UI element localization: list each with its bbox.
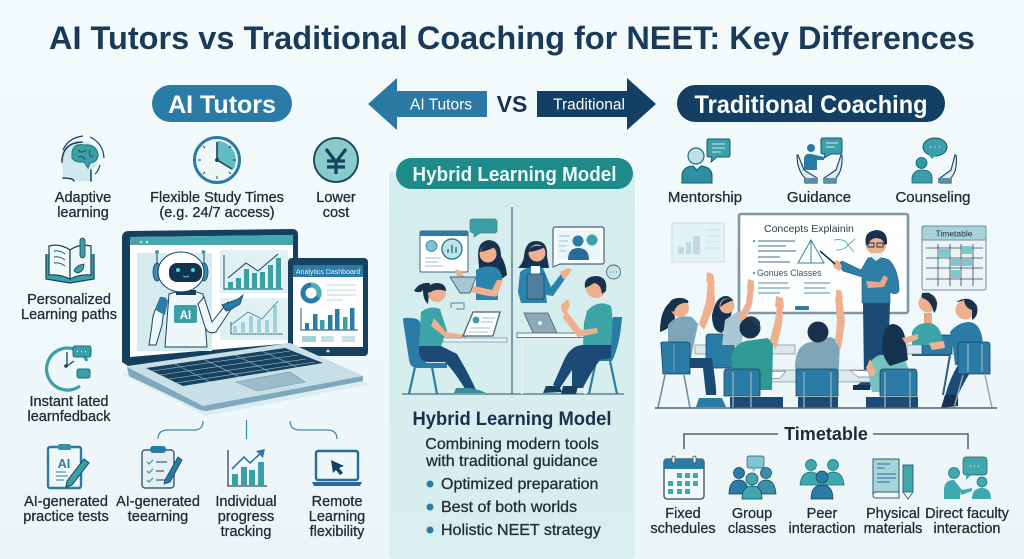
- icon: checklist clipboard: [142, 446, 182, 488]
- standing woman presenter: [518, 241, 572, 303]
- icon: group classes: [729, 456, 776, 499]
- label: group classes: Group: [732, 506, 772, 522]
- laptop base: [127, 343, 363, 411]
- hybrid heading text: Hybrid Learning Model: [412, 408, 612, 430]
- label: adaptive learning: Adaptive: [55, 190, 111, 206]
- label: physical materials: materials: [864, 521, 922, 537]
- heading: timetable with bracket: Timetable: [784, 424, 868, 444]
- heading: AI Tutors: AI Tutors: [168, 91, 276, 119]
- student: long hair front right: [866, 324, 918, 408]
- label: direct faculty interaction: Direct faculty: [925, 506, 1010, 522]
- icon: instant feedback clock: [47, 346, 91, 390]
- whiteboard: Concepts Explainin: [764, 223, 854, 235]
- vs label: VS: [497, 91, 527, 117]
- student: grey-blue shirt raising hand: [795, 290, 845, 408]
- label: personalized learning paths: Personalized: [27, 292, 111, 308]
- classroom floor: [655, 407, 997, 409]
- label: instant feedback: Instant lated: [30, 394, 108, 410]
- student: ponytail raising hand: [658, 272, 734, 408]
- icon: open book with pen: [46, 238, 94, 283]
- students' back desks: [695, 345, 957, 382]
- arrow: Traditional: Traditional: [553, 96, 625, 114]
- pill: hybrid heading: Hybrid Learning Model: [412, 163, 616, 186]
- label: fixed schedules: Fixed: [665, 506, 701, 522]
- panel: hybrid learning model: [389, 158, 635, 559]
- label: peer interaction: interaction: [789, 521, 855, 537]
- label: guidance: Guidance: [787, 189, 851, 206]
- icon: physical materials: [873, 459, 913, 499]
- label: AI-generated learning: teearning: [128, 509, 188, 525]
- label: remote learning flexibility: Remote: [312, 494, 362, 510]
- icon: remote laptop: [312, 451, 362, 486]
- icon: peer interaction: [800, 460, 844, 499]
- seated man at table: [543, 276, 622, 394]
- arrow: AI Tutors: AI Tutors: [410, 96, 472, 114]
- icon: adaptive learning: [61, 136, 104, 181]
- tablet: Analytics Dashboard: [296, 269, 360, 276]
- icon: fixed schedules calendar: [664, 456, 704, 499]
- label: remote learning flexibility: Learning: [309, 509, 365, 525]
- standing woman with tablet: [450, 240, 507, 300]
- icon: clock: [194, 138, 240, 182]
- label: instant feedback: learnfedback: [27, 409, 111, 425]
- timetable poster: Timetable: [935, 228, 973, 238]
- seated woman at laptop: [403, 283, 507, 394]
- icon: guidance: [797, 138, 842, 183]
- hybrid description: Combining modern tools: [425, 436, 599, 453]
- label: individual progress tracking: tracking: [221, 524, 271, 540]
- label: lower cost: cost: [323, 205, 349, 221]
- web card with chart: [420, 231, 468, 272]
- whiteboard: Gonues Classes: [757, 268, 822, 278]
- timetable poster: [922, 226, 986, 290]
- student: teal shirt raising hand: [724, 296, 784, 408]
- label: physical materials: Physical: [866, 506, 920, 522]
- title: AI Tutors vs Traditional Coaching for NEET: Key Differences: [49, 20, 975, 56]
- pill: hybrid heading: [396, 158, 633, 189]
- icon: mentorship: [682, 139, 730, 183]
- heading: Traditional Coaching: Traditional Coaching: [694, 91, 928, 119]
- video call card: [553, 227, 604, 267]
- student: long hair raising hand: [712, 279, 754, 345]
- icon: counseling: [912, 138, 956, 183]
- label: remote learning flexibility: flexibility: [310, 524, 365, 540]
- laptop and table: [517, 313, 591, 394]
- label: flexible study times: Flexible Study Times: [150, 190, 284, 206]
- icon: yen coin: [314, 138, 358, 182]
- tablet: [288, 258, 368, 356]
- label: group classes: classes: [728, 521, 776, 537]
- speech bubble: [470, 219, 497, 237]
- faint wall chart: [672, 223, 724, 262]
- illustration: laptop with AI robot: [121, 229, 371, 416]
- label: peer interaction: Peer: [807, 506, 837, 522]
- label: fixed schedules: schedules: [650, 521, 716, 537]
- heading: Traditional Coaching: [677, 85, 945, 122]
- heading: AI Tutors: [152, 85, 292, 122]
- label: AI-generated learning: AI-generated: [116, 494, 200, 510]
- heading: timetable with bracket: [684, 424, 968, 449]
- label: individual progress tracking: progress: [218, 509, 274, 525]
- small chat bubble: [606, 265, 620, 279]
- icon: AI practice test clipboard: [48, 444, 89, 488]
- hybrid divider and floor: [402, 207, 624, 394]
- label: lower cost: Lower: [316, 190, 356, 206]
- student: teal shirt seated right: [902, 293, 952, 395]
- label: adaptive learning: learning: [57, 205, 109, 221]
- hybrid bullet list: Holistic NEET strategy: [441, 522, 601, 539]
- student: blue shirt seated far right: [929, 299, 992, 408]
- label: individual progress tracking: Individual: [215, 494, 277, 510]
- label: counseling: Counseling: [895, 189, 971, 206]
- icon: AI practice test clipboard: AI: [58, 457, 70, 471]
- label: direct faculty interaction: interaction: [934, 521, 1000, 537]
- hybrid description: with traditional guidance: [425, 453, 598, 470]
- robot: [149, 250, 243, 347]
- label: AI-generated practice tests: practice tests: [23, 509, 109, 525]
- teacher: [820, 230, 899, 390]
- icon: progress chart: [228, 449, 267, 486]
- hybrid bullet list: Best of both worlds: [441, 499, 577, 516]
- hybrid bullet list: Optimized preparation: [441, 476, 598, 493]
- arrow: Traditional: [537, 78, 656, 130]
- arrow: AI Tutors: [368, 78, 487, 130]
- label: flexible study times: (e.g. 24/7 access): [159, 205, 275, 221]
- small chat icon: [451, 303, 464, 309]
- robot: AI: [180, 310, 191, 322]
- label: mentorship: Mentorship: [668, 189, 742, 206]
- connector lines from laptop: [158, 420, 337, 439]
- icon: direct faculty interaction: [944, 457, 991, 499]
- whiteboard: [739, 214, 908, 313]
- hybrid bullet list: [426, 476, 601, 539]
- label: personalized learning paths: Learning paths: [21, 307, 117, 323]
- label: AI-generated practice tests: AI-generated: [24, 494, 108, 510]
